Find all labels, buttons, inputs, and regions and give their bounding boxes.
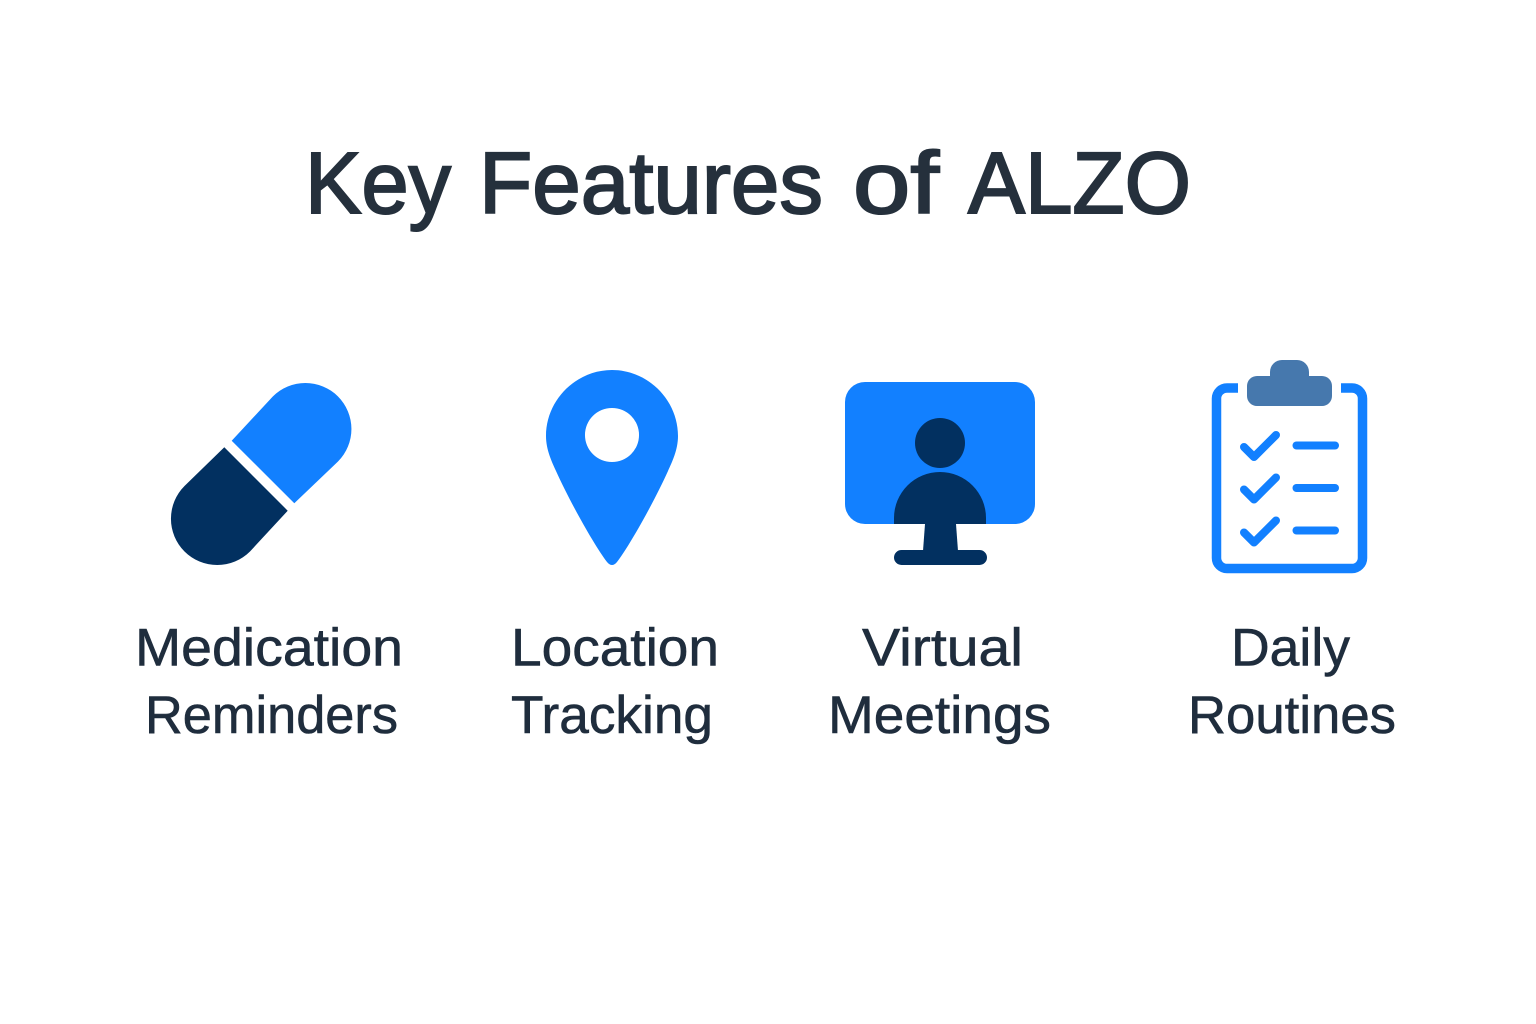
icon: location pin: [546, 370, 678, 565]
title: Key: [305, 135, 451, 232]
label: medication reminders: Reminders: [145, 686, 398, 745]
title: Features: [479, 135, 823, 232]
feature: medication reminders: [135, 383, 403, 745]
icon: pill capsule: [171, 383, 351, 565]
feature: virtual meetings: [828, 382, 1051, 745]
label: daily routines: Routines: [1188, 686, 1396, 745]
label: location tracking: [511, 618, 719, 745]
label: virtual meetings: Meetings: [828, 686, 1051, 745]
feature: location tracking: [511, 370, 719, 745]
icon: clipboard checklist: [1216, 360, 1362, 568]
label: location tracking: Location: [511, 618, 719, 678]
label: location tracking: Tracking: [511, 686, 713, 745]
title: ALZO: [968, 135, 1191, 232]
label: medication reminders: [135, 618, 403, 745]
label: medication reminders: Medication: [135, 618, 403, 678]
feature: daily routines: [1188, 360, 1396, 745]
label: daily routines: Daily: [1231, 618, 1350, 678]
label: virtual meetings: [828, 618, 1051, 745]
title: of: [853, 135, 940, 232]
label: daily routines: [1188, 618, 1396, 745]
icon: monitor with person: [845, 382, 1035, 565]
label: virtual meetings: Virtual: [862, 618, 1023, 678]
